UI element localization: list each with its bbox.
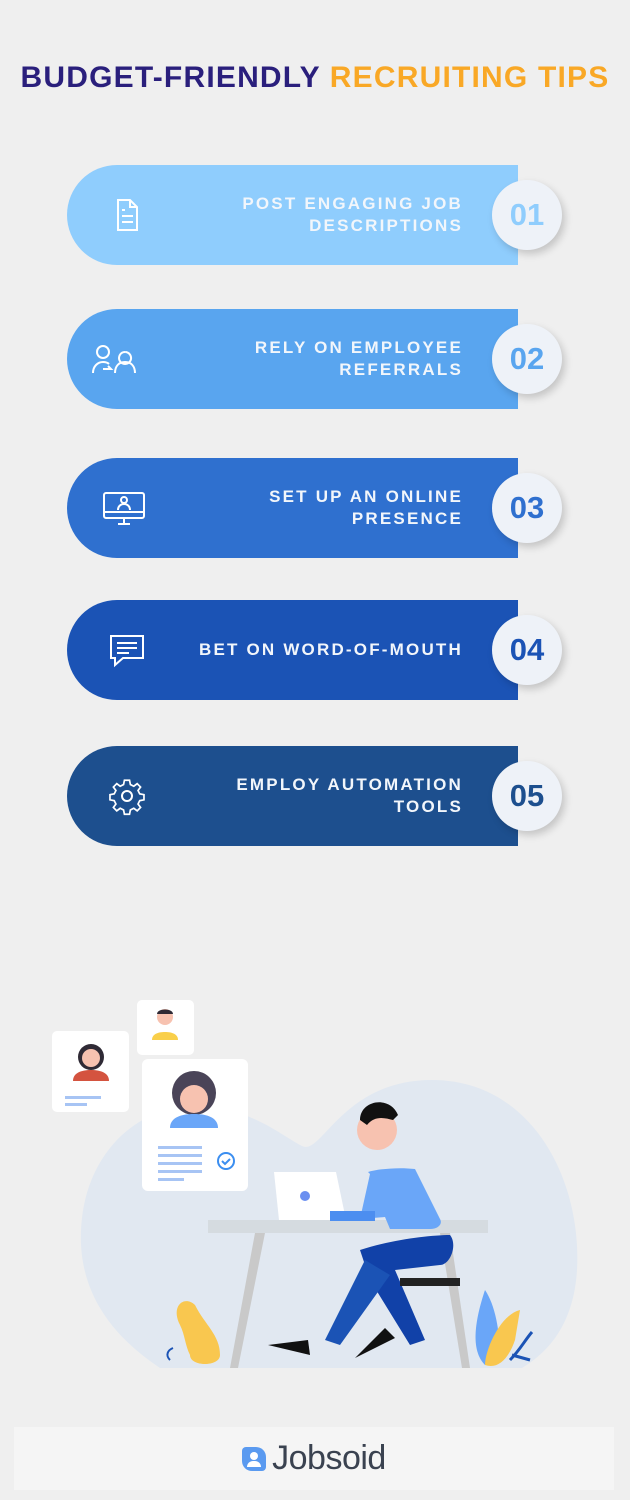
number 05: 05 bbox=[510, 778, 544, 813]
number 03 bbox=[492, 473, 562, 543]
icon: chat bbox=[110, 635, 144, 668]
text: tip 3: SET UP AN ONLINE bbox=[269, 487, 463, 506]
number 01 bbox=[492, 180, 562, 250]
number 01: 01 bbox=[510, 197, 544, 232]
illustration: recruiter at desk bbox=[52, 1000, 578, 1368]
text: Jobsoid: Jobsoid bbox=[272, 1439, 386, 1477]
text: tip 2: REFERRALS bbox=[339, 360, 463, 379]
number 03: 03 bbox=[510, 490, 544, 525]
icon: monitor bbox=[103, 492, 145, 525]
footer: logo bbox=[14, 1427, 614, 1490]
text: tip 2 bbox=[255, 338, 463, 379]
text: tip 2: RELY ON EMPLOYEE bbox=[255, 338, 463, 357]
icon: jobsoid logo bbox=[242, 1446, 266, 1470]
text: tip 5: EMPLOY AUTOMATION bbox=[236, 775, 463, 794]
icon: referral people bbox=[92, 345, 136, 373]
candidate card top bbox=[137, 1000, 194, 1055]
desk bbox=[208, 1220, 488, 1368]
text: tip 1: DESCRIPTIONS bbox=[309, 216, 463, 235]
person bbox=[268, 1102, 460, 1358]
text: tip 3 bbox=[269, 487, 463, 528]
text: tip 4: BET ON WORD-OF-MOUTH bbox=[199, 640, 463, 659]
text: tip 5 bbox=[236, 775, 463, 816]
background blob bbox=[81, 1080, 577, 1368]
number 04 bbox=[492, 615, 562, 685]
panel: tip 4 bbox=[67, 600, 518, 700]
panel: tip 3 bbox=[67, 458, 518, 558]
candidate card small bbox=[52, 1031, 129, 1112]
text: tip 5: TOOLS bbox=[394, 797, 463, 816]
panel: tip 2 bbox=[67, 309, 518, 409]
icon: document bbox=[117, 199, 138, 231]
candidate card large bbox=[142, 1059, 248, 1191]
laptop bbox=[274, 1172, 346, 1220]
panel: tip 1 bbox=[67, 165, 518, 265]
number 02 bbox=[492, 324, 562, 394]
panel: tip 5 bbox=[67, 746, 518, 846]
text: tip 3: PRESENCE bbox=[352, 509, 463, 528]
number 02: 02 bbox=[510, 341, 544, 376]
title: BUDGET-FRIENDLY RECRUITING TIPS bbox=[21, 61, 609, 94]
text: tip 1 bbox=[242, 194, 463, 235]
number 04: 04 bbox=[510, 632, 544, 667]
plants bbox=[177, 1301, 220, 1364]
number 05 bbox=[492, 761, 562, 831]
text: tip 1: POST ENGAGING JOB bbox=[242, 194, 463, 213]
icon: gear bbox=[109, 779, 145, 816]
